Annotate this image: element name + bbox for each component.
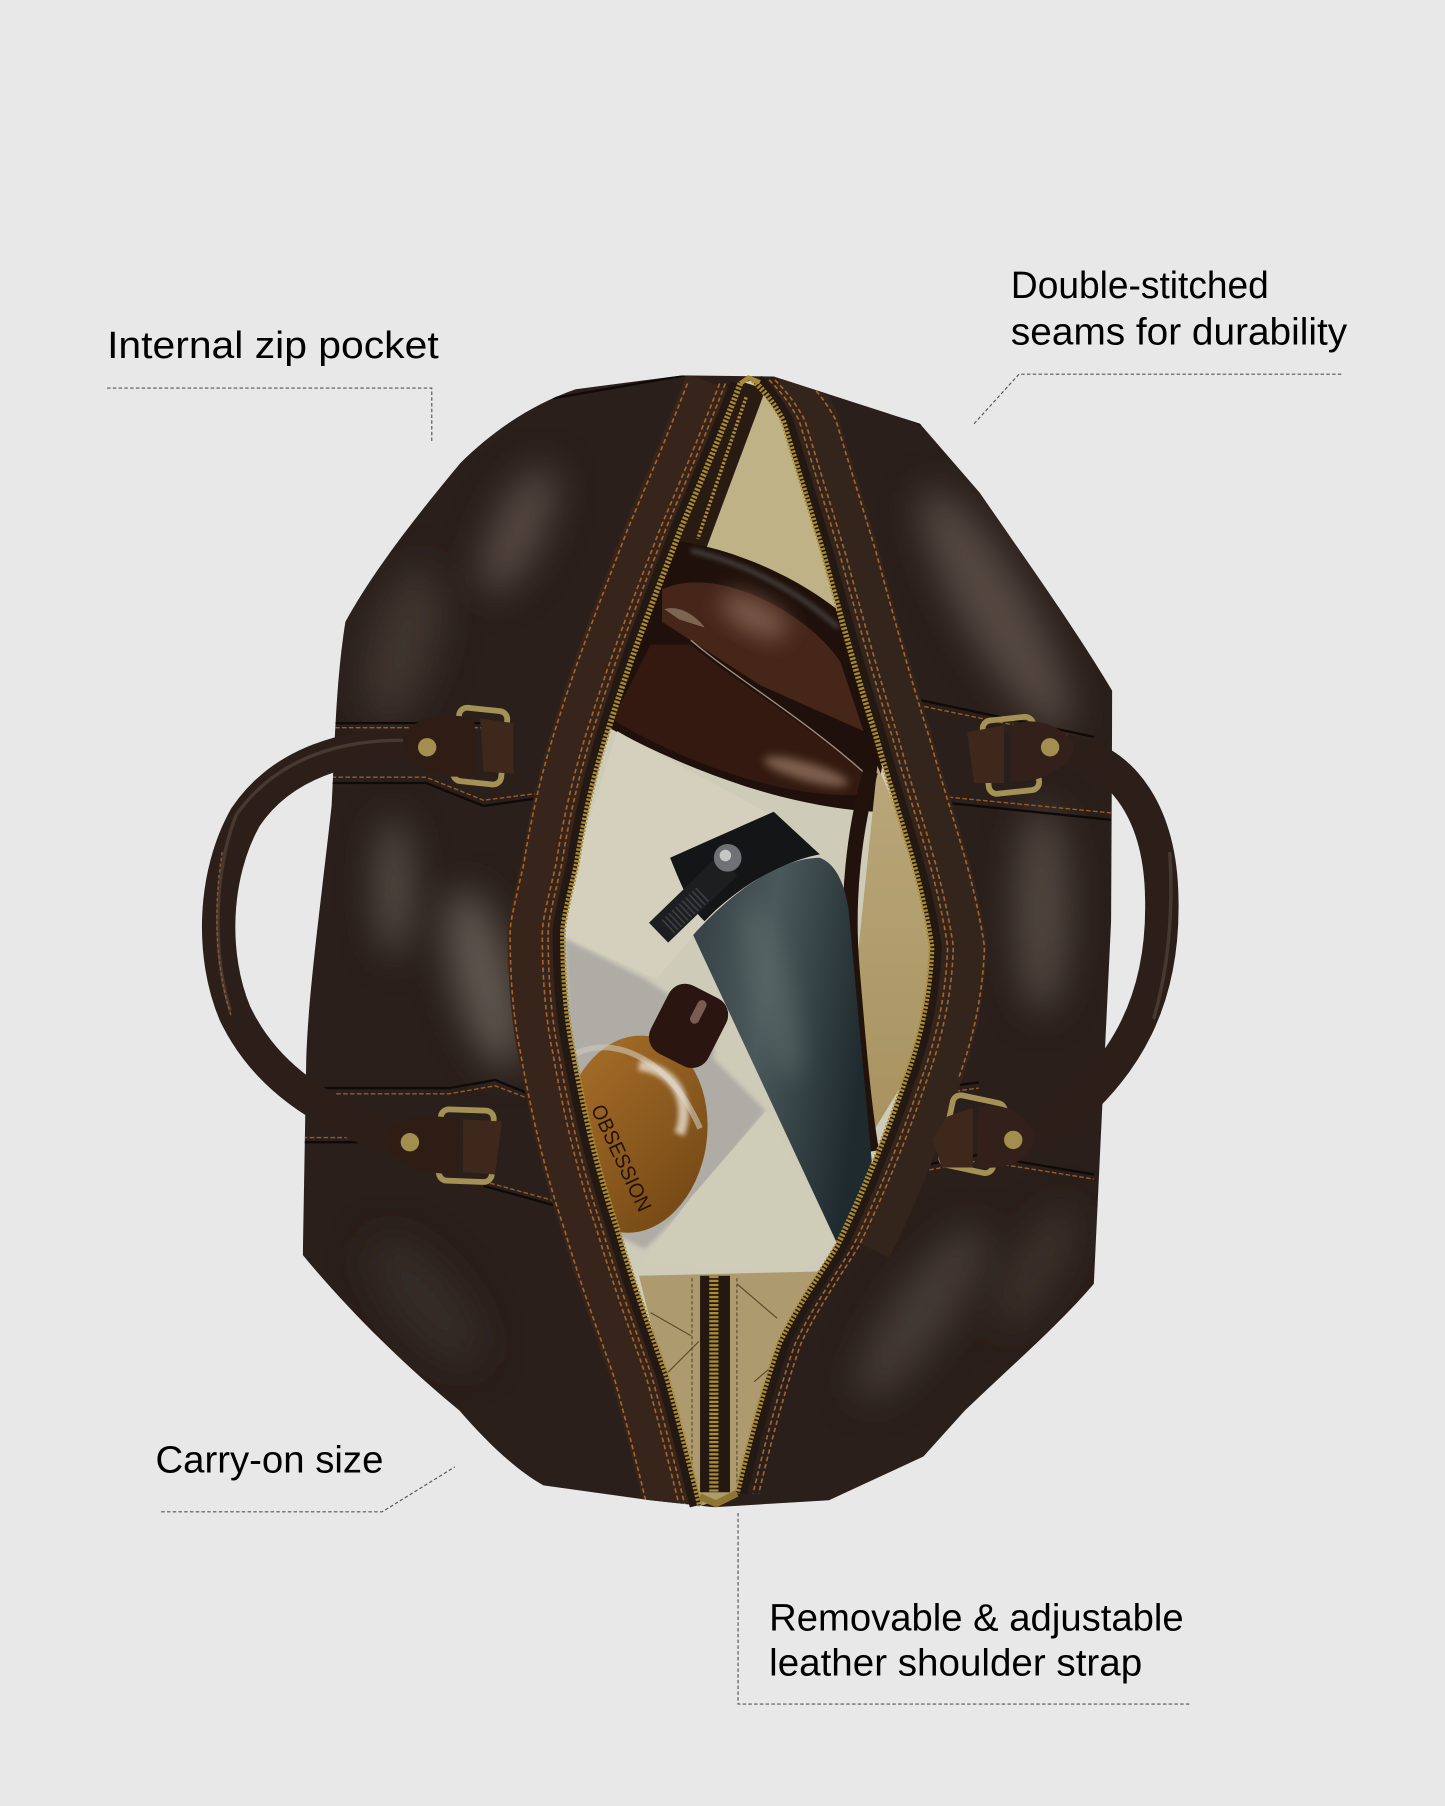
callout: shoulder strap: leather shoulder strap	[769, 1642, 1142, 1684]
callout: double-stitched seams	[974, 265, 1347, 424]
top left buckle	[403, 707, 514, 785]
leader line	[107, 388, 432, 442]
callout: shoulder strap	[738, 1513, 1189, 1704]
label text: Removable & adjustable	[769, 1597, 1184, 1639]
shoes	[604, 541, 887, 812]
inner pocket, top	[674, 382, 764, 550]
bottom lining	[639, 1271, 835, 1508]
label text: Internal zip pocket	[107, 325, 439, 367]
right lining	[858, 766, 935, 1134]
zip leather bands	[535, 383, 713, 1506]
perfume	[575, 984, 728, 1233]
bottle lid	[670, 812, 820, 921]
rivet	[1004, 1131, 1022, 1149]
bottom left buckle	[386, 1109, 502, 1182]
band stitching	[510, 380, 984, 1506]
water bottle	[659, 812, 875, 1246]
leader line	[974, 374, 1341, 424]
perfume label: OBSESSION	[586, 1101, 656, 1215]
bag photo	[217, 368, 1171, 1520]
label text: Carry-on size	[155, 1440, 383, 1482]
bottle grip	[659, 866, 728, 933]
grey towel	[564, 938, 766, 1249]
side strap bands	[303, 375, 1111, 1211]
cream fabric	[616, 731, 638, 742]
perfume cap	[643, 977, 735, 1074]
leather sheen	[348, 456, 1095, 1415]
right handle	[933, 716, 1171, 1175]
lower shoe	[613, 645, 869, 795]
bottle knob	[714, 844, 741, 872]
upper shoe	[662, 582, 864, 731]
left handle	[217, 707, 514, 1182]
bottle body	[693, 858, 875, 1246]
top right buckle	[967, 716, 1073, 795]
callout: double-stitched seams: seams for durability	[1011, 311, 1347, 353]
bag body	[288, 368, 1128, 1520]
bag interior	[549, 374, 944, 1514]
rivet	[401, 1133, 419, 1151]
main zip	[558, 378, 936, 1506]
leader line	[161, 1467, 455, 1512]
label text: Double-stitched	[1011, 265, 1269, 307]
callout: internal zip pocket	[107, 325, 439, 442]
callout: carry-on size	[155, 1440, 455, 1512]
perfume bottle	[579, 1036, 708, 1233]
inner pocket zip, bottom	[700, 1276, 730, 1492]
leader line	[738, 1513, 1189, 1704]
rivet	[1041, 738, 1059, 756]
top lining	[707, 395, 838, 609]
bottom right buckle	[933, 1094, 1034, 1175]
rivet	[418, 738, 436, 756]
